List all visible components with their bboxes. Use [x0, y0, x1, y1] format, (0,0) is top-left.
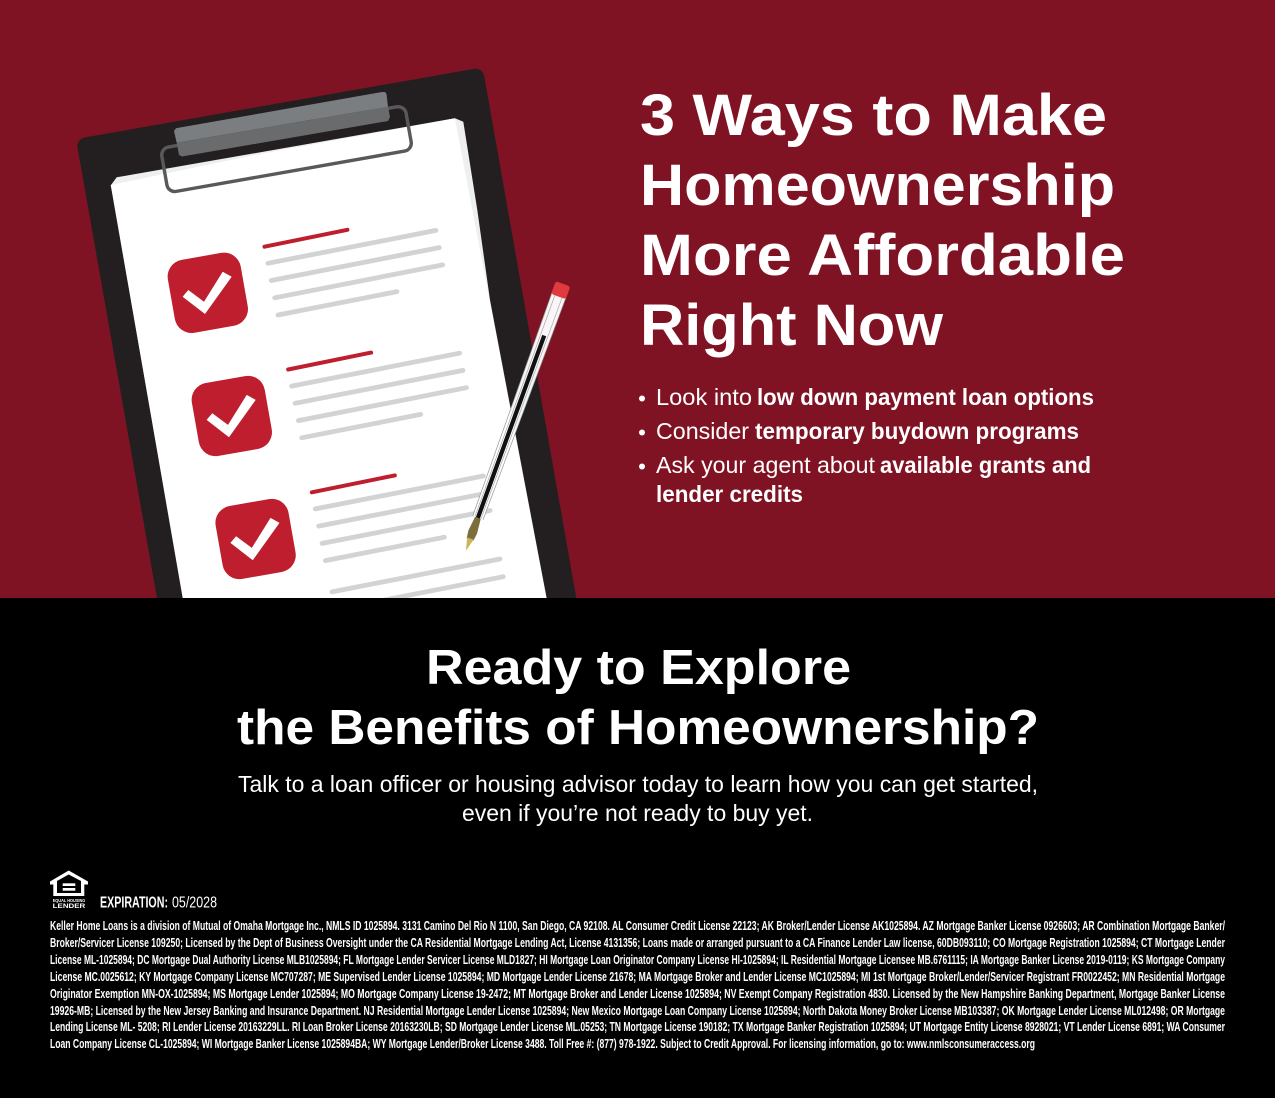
bullet 1: Look into: [656, 384, 752, 410]
title: More Affordable: [640, 223, 1125, 288]
title: Right Now: [640, 293, 944, 358]
bullet 3: available grants and: [880, 452, 1091, 478]
call to action heading: the Benefits of Homeownership?: [237, 701, 1039, 755]
bullet list: [639, 384, 1094, 507]
panel: black bottom section: [0, 598, 1275, 1098]
front sheet of paper: [111, 118, 547, 600]
expiration date: 05/2028: [172, 894, 217, 912]
checklist item 1: [165, 230, 443, 336]
title: Homeownership: [640, 153, 1115, 218]
bullet 3: Ask your agent about: [656, 452, 876, 478]
bullet 2: temporary buydown programs: [755, 418, 1079, 444]
extra paper lines at bottom: [332, 559, 503, 610]
expiration date: EXPIRATION:: [100, 894, 168, 912]
panel: maroon top section: [0, 0, 1275, 598]
icon: equal housing lender logo: LENDER: [53, 903, 86, 910]
call to action heading: [237, 641, 1039, 755]
back sheet of paper: [111, 118, 547, 600]
icon: equal housing lender logo: EQUAL HOUSING: [53, 898, 86, 903]
title: 3 Ways to Make: [640, 83, 1107, 148]
clip ring: [160, 105, 413, 193]
bullet 1: low down payment loan options: [757, 384, 1094, 410]
checklist item 2: [189, 353, 466, 459]
legal disclosure text: [50, 919, 1225, 1051]
clipboard backing board: [76, 67, 587, 730]
bullet 2: Consider: [656, 418, 749, 444]
call to action body text: [238, 771, 1038, 826]
checklist item 3: [213, 475, 490, 582]
icon: ballpoint pen: [459, 281, 570, 553]
bullet 3: [639, 452, 1091, 507]
call to action body text: even if you’re not ready to buy yet.: [462, 800, 813, 826]
clip bar: [174, 92, 390, 156]
title: [640, 83, 1125, 358]
call to action body text: Talk to a loan officer or housing advisor today to learn how you can get started,: [238, 771, 1038, 797]
illustration: clipboard with checklist: [76, 67, 587, 730]
icon: equal housing lender logo: [50, 870, 88, 910]
call to action heading: Ready to Explore: [426, 641, 851, 695]
bullet 3: lender credits: [656, 481, 803, 507]
